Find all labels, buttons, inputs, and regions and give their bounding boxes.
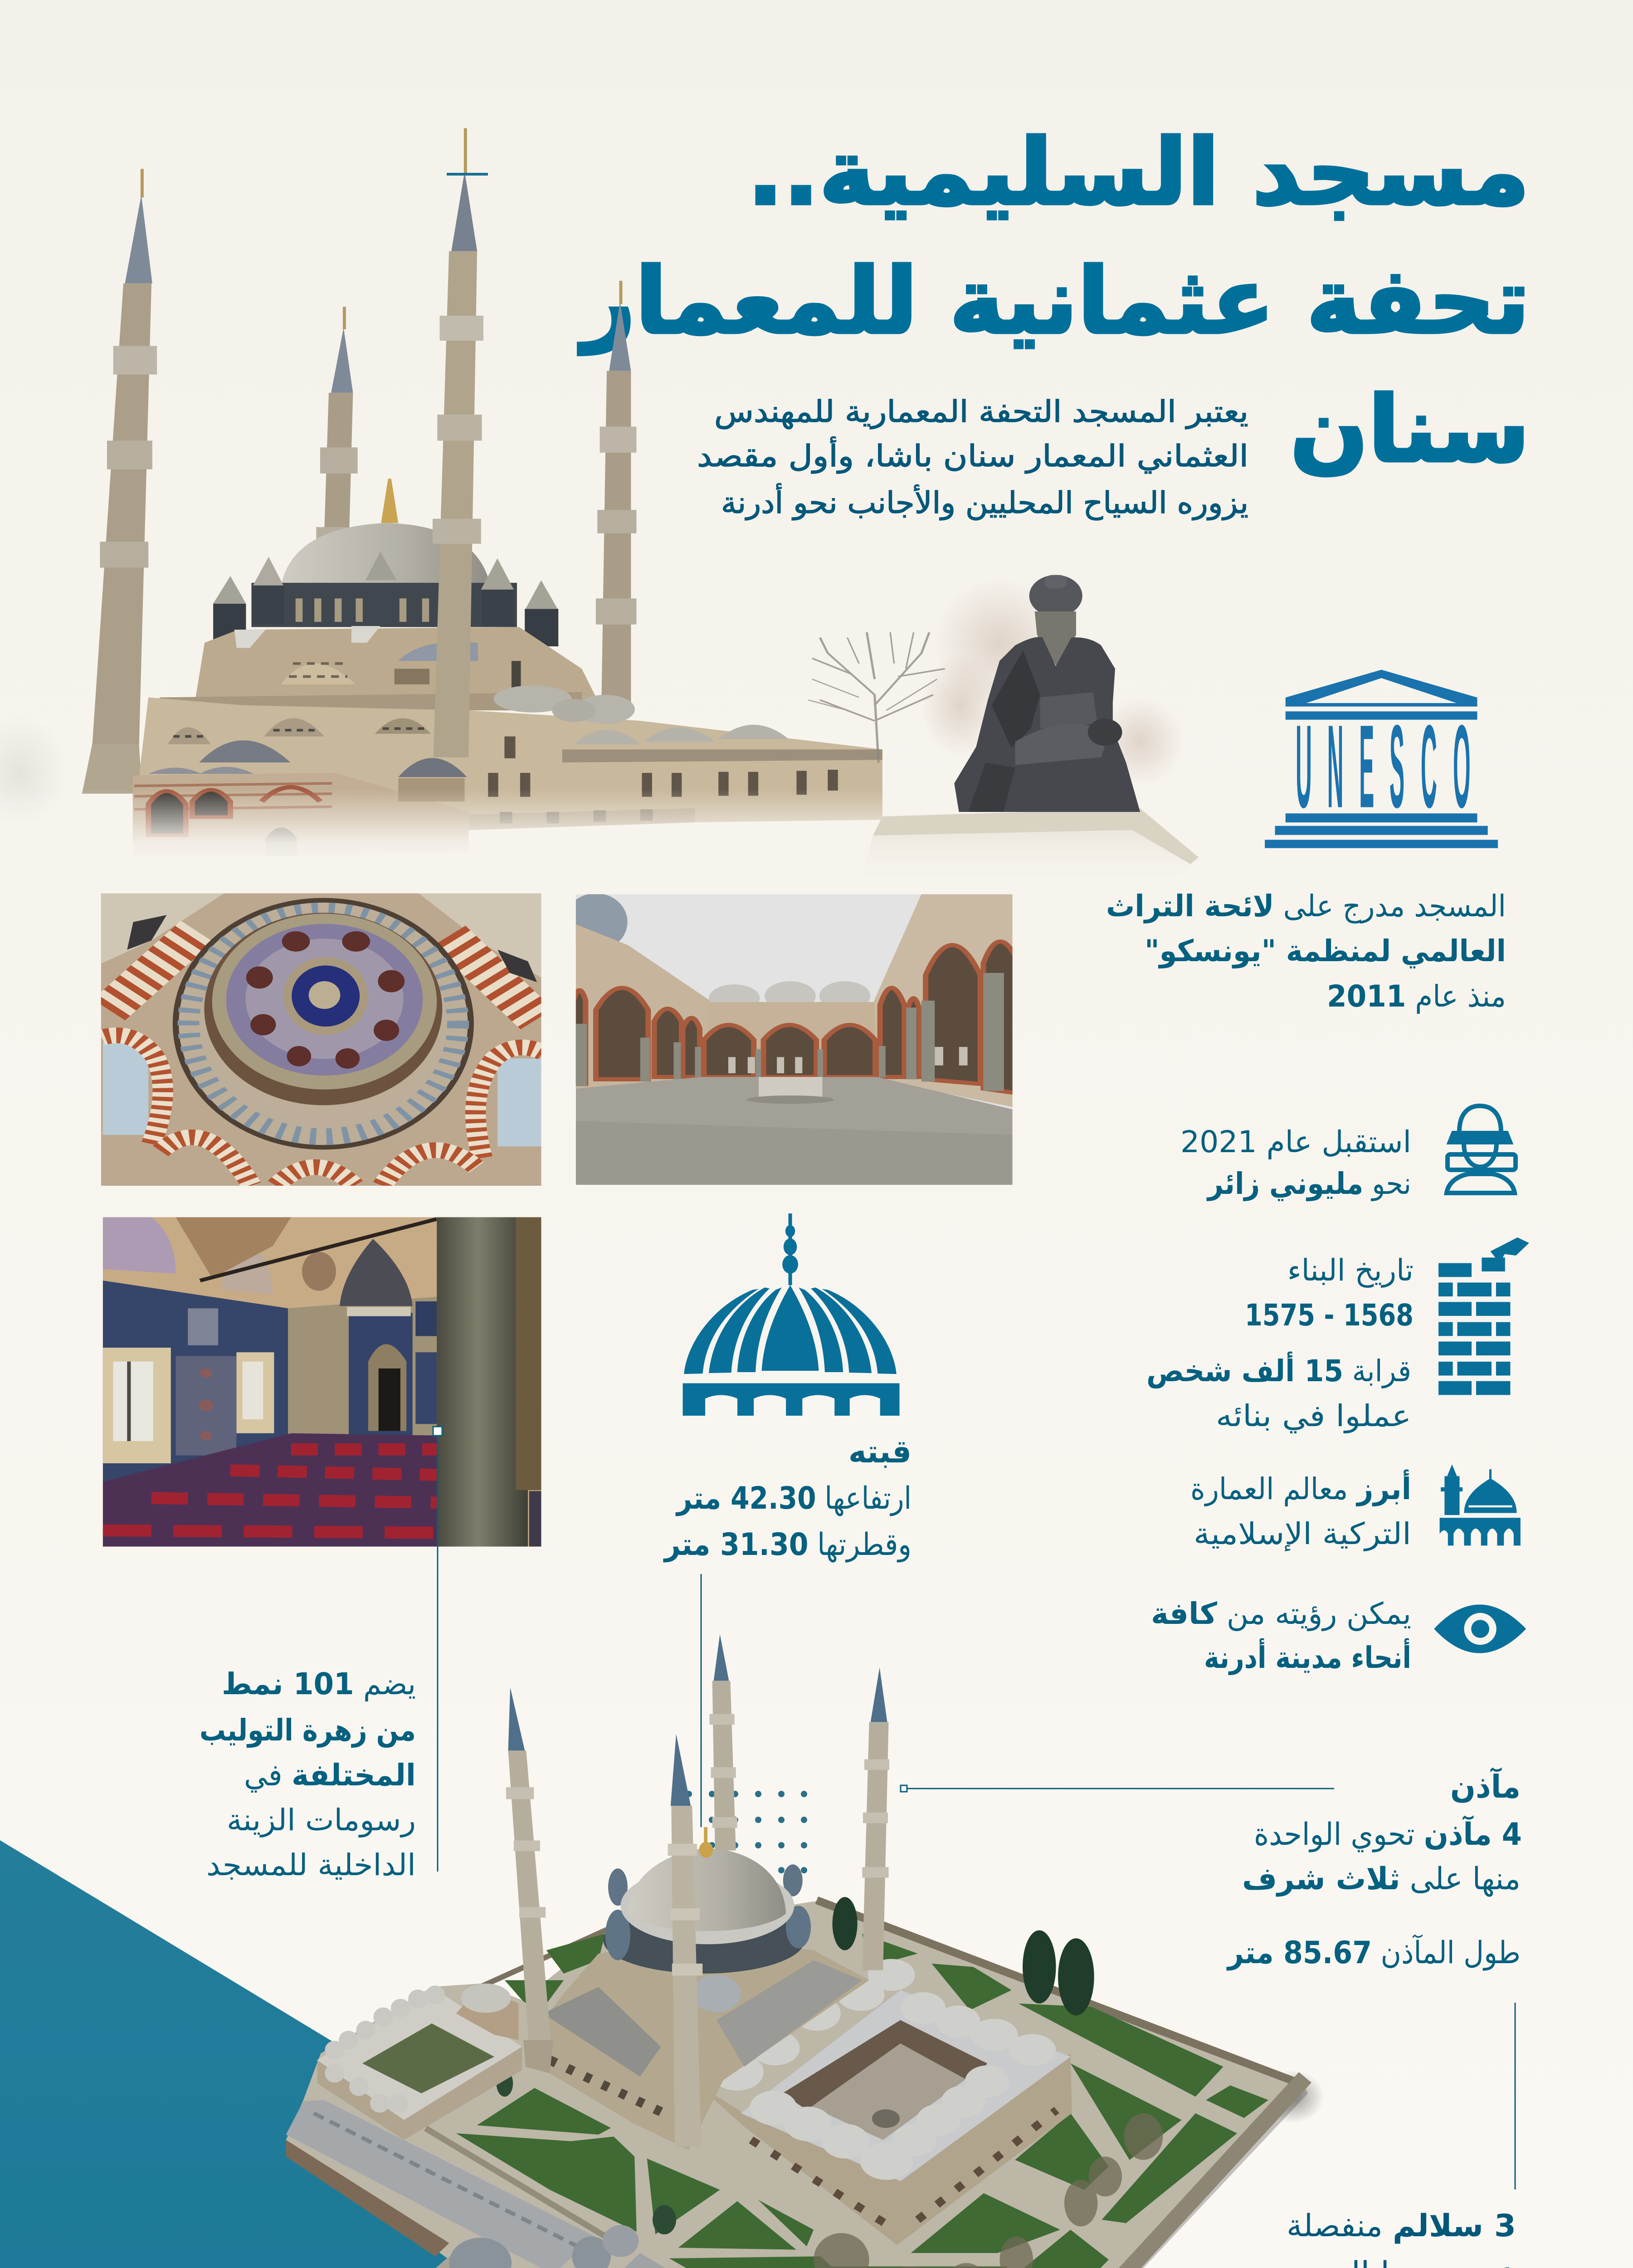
main dome aerial [621, 1827, 794, 1944]
minaret left [82, 169, 157, 794]
architecture text [1190, 1469, 1411, 1551]
UNESCO logo: E [1359, 700, 1374, 832]
dome text [663, 1433, 912, 1563]
minarets text: طول المآذن 85.67 متر [1226, 1934, 1521, 1971]
construction text: 1568 - 1575 [1245, 1298, 1414, 1333]
UNESCO logo: S [1389, 700, 1404, 832]
minarets text: منها على ثلاث شرف [1242, 1861, 1521, 1897]
title: سنان [1290, 377, 1530, 483]
UNESCO logo: O [1453, 700, 1471, 832]
icon: traveller [1447, 1106, 1516, 1193]
icon: dome [683, 1213, 900, 1416]
photo: prayer hall interior [103, 1217, 541, 1547]
garden trees [497, 1897, 1163, 2268]
dome text: ارتفاعها 42.30 متر [675, 1481, 912, 1516]
icon: eye [1434, 1604, 1526, 1653]
icon: mosque [1440, 1464, 1521, 1545]
medrese with courtyard [317, 1984, 522, 2140]
construction text: عملوا في بنائه [1216, 1398, 1411, 1433]
striped front arcade [133, 773, 468, 856]
UNESCO logo: N [1327, 700, 1344, 832]
small dome block [414, 2225, 639, 2268]
photo: courtyard [564, 893, 1017, 1185]
minaret callout line [901, 1785, 1334, 1792]
UNESCO logo [1265, 670, 1498, 848]
dot grid [686, 1791, 807, 1873]
stairs text [1283, 2208, 1516, 2268]
secondary domes [148, 685, 789, 777]
UNESCO text: منذ عام 2011 [1327, 979, 1506, 1014]
dome callout line [700, 1574, 702, 1827]
visitors text [1180, 1124, 1411, 1202]
main dome [281, 479, 490, 586]
construction text [1146, 1253, 1414, 1433]
tile text: الداخلية للمسجد [206, 1848, 416, 1882]
courtyard block [696, 1959, 1072, 2245]
visibility text: أنحاء مدينة أدرنة [1204, 1638, 1411, 1675]
lower tier [133, 697, 882, 830]
architecture text: التركية الإسلامية [1194, 1516, 1411, 1551]
photo: dome interior [101, 893, 543, 1186]
UNESCO logo: C [1421, 700, 1437, 832]
intro text: يعتبر المسجد التحفة المعمارية للمهندس [714, 394, 1248, 429]
arasta roofs [286, 2100, 960, 2268]
aerial minarets [506, 1634, 889, 2146]
minaret rear left [316, 307, 358, 540]
icon: bricks [1438, 1237, 1529, 1395]
middle tier stone walls [148, 626, 597, 710]
construction text: قرابة 15 ألف شخص [1146, 1351, 1411, 1388]
central minaret [433, 128, 483, 757]
intro text: العثماني المعمار سنان باشا، وأول مقصد [697, 436, 1248, 474]
drum [603, 1864, 811, 1974]
pedestal [859, 808, 1199, 889]
small accent dash [447, 173, 488, 176]
visibility text [1151, 1596, 1411, 1675]
tree left [0, 716, 66, 830]
aerial view of the complex [286, 1634, 1324, 2268]
intro text [697, 394, 1248, 520]
tile text: المختلفة في [244, 1758, 416, 1793]
tile text: من زهرة التوليب [200, 1713, 416, 1748]
UNESCO text: العالمي لمنظمة "يونسكو" [1145, 934, 1506, 969]
main mosque body [526, 1937, 869, 2150]
visibility text: يمكن رؤيته من كافة [1151, 1596, 1411, 1631]
tile text [200, 1667, 416, 1882]
teal diagonal panel [0, 1840, 1379, 2268]
outer walls [428, 1901, 1300, 2268]
minarets text: 4 مآذن تحوي الواحدة [1254, 1815, 1522, 1853]
minarets text [1226, 1767, 1522, 1971]
UNESCO text: المسجد مدرج على لائحة التراث [1106, 889, 1506, 924]
tile text: يضم 101 نمط [222, 1667, 416, 1701]
visitors text: نحو مليوني زائر [1206, 1166, 1411, 1202]
architecture text: أبرز معالم العمارة [1190, 1469, 1411, 1506]
title: تحفة عثمانية للمعمار [578, 249, 1530, 355]
visitors text: استقبل عام 2021 [1180, 1124, 1411, 1159]
intro text: يزوره السياح المحليين والأجانب نحو أدرنة [721, 483, 1248, 520]
dome text: وقطرتها 31.30 متر [663, 1527, 912, 1563]
lawns [456, 1934, 1268, 2268]
stairs callout line [1515, 2003, 1516, 2190]
title [578, 120, 1530, 483]
statue of Sinan [954, 575, 1140, 812]
ground platform [286, 1900, 1300, 2268]
photo callout marker [433, 1427, 442, 1872]
UNESCO logo: U [1296, 700, 1312, 832]
autumn tree [921, 577, 1183, 786]
minaret right [596, 281, 636, 710]
UNESCO text [1106, 889, 1506, 1014]
drop shadow [828, 2070, 1324, 2268]
construction text: تاريخ البناء [1287, 1253, 1414, 1288]
dome text: قبته [848, 1433, 912, 1470]
tile text: رسومات الزينة [227, 1803, 416, 1838]
minarets text: مآذن [1450, 1767, 1521, 1805]
stairs text: 3 سلالم منفصلة [1287, 2208, 1516, 2244]
tree near statue [808, 632, 945, 763]
drum and turrets [213, 552, 558, 646]
hero: Selimiye Mosque elevation [0, 128, 1183, 856]
fog over mosque base [0, 789, 1043, 866]
title: مسجد السليمية.. [747, 120, 1530, 225]
